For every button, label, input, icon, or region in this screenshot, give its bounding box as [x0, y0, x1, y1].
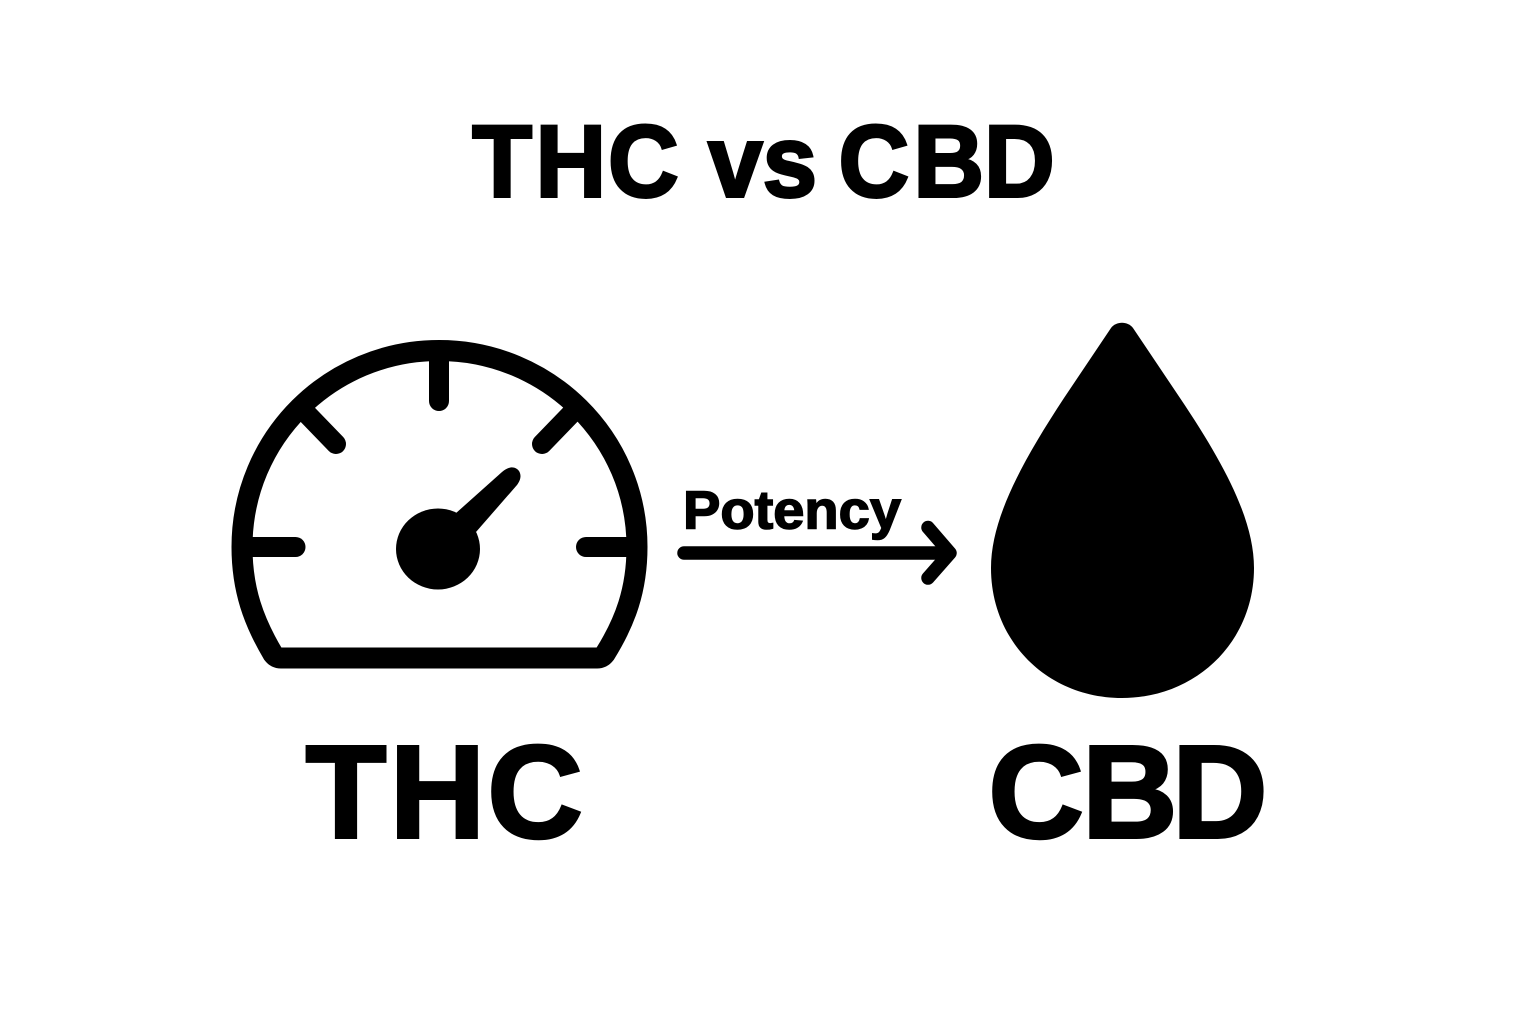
gauge tick marks [248, 355, 630, 547]
arrow [684, 528, 950, 578]
gauge needle [396, 467, 520, 590]
icon: drop [991, 323, 1254, 698]
arrow label: Potency [683, 480, 901, 540]
title: THC vs CBD [472, 105, 1055, 219]
label: THC: THC [306, 718, 583, 865]
icon: gauge [242, 350, 637, 658]
label: CBD: CBD [988, 718, 1268, 865]
gauge outline [242, 350, 637, 658]
